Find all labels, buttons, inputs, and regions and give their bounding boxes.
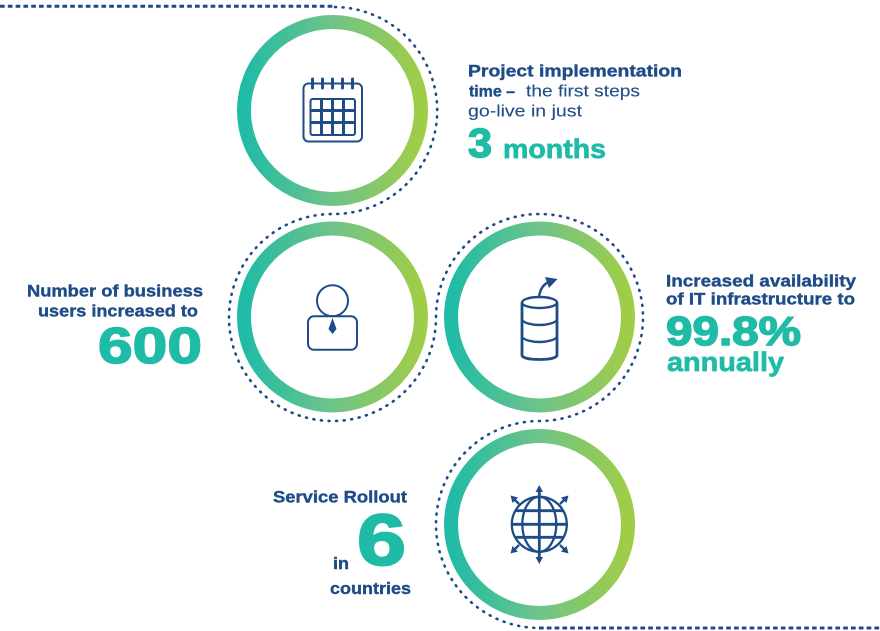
text: service rollout: 6 (357, 501, 406, 581)
text: service rollout: in (333, 554, 349, 573)
text: business users: users increased to (38, 302, 198, 321)
text: business users: 600 (98, 317, 202, 374)
icon: calendar (304, 79, 362, 142)
dotted connector around circles (229, 7, 643, 628)
text: business users (27, 282, 203, 374)
icon: database with arrow (522, 277, 558, 360)
dashed connector: top (0, 5, 335, 8)
text: infrastructure availability: Increased availability (666, 272, 857, 291)
text: service rollout: countries (330, 579, 411, 598)
text: project implementation time: go-live in just (468, 102, 582, 121)
text: infrastructure availability: of IT infrastructure to (666, 290, 855, 308)
ring: project time (244, 22, 421, 199)
text: business users: Number of business (27, 282, 203, 301)
text: project implementation time: the first steps (526, 82, 640, 101)
ring: infrastructure (451, 228, 628, 406)
dashed connector: bottom (539, 626, 880, 630)
text: infrastructure availability (666, 272, 857, 377)
text: project implementation time: months (503, 134, 606, 164)
text: project implementation time (468, 62, 682, 166)
text: infrastructure availability: annually (667, 347, 784, 377)
text: infrastructure availability: 99.8% (666, 308, 801, 354)
text: project implementation time: time – (469, 84, 515, 101)
text: project implementation time: Project implementation (468, 62, 682, 81)
icon: business person (308, 285, 357, 350)
icon: globe with arrows (510, 485, 568, 564)
text: service rollout: Service Rollout (273, 488, 407, 507)
ring: rollout (451, 436, 628, 613)
text: service rollout (273, 488, 411, 598)
ring: business users (244, 228, 421, 406)
text: project implementation time: 3 (468, 120, 492, 166)
